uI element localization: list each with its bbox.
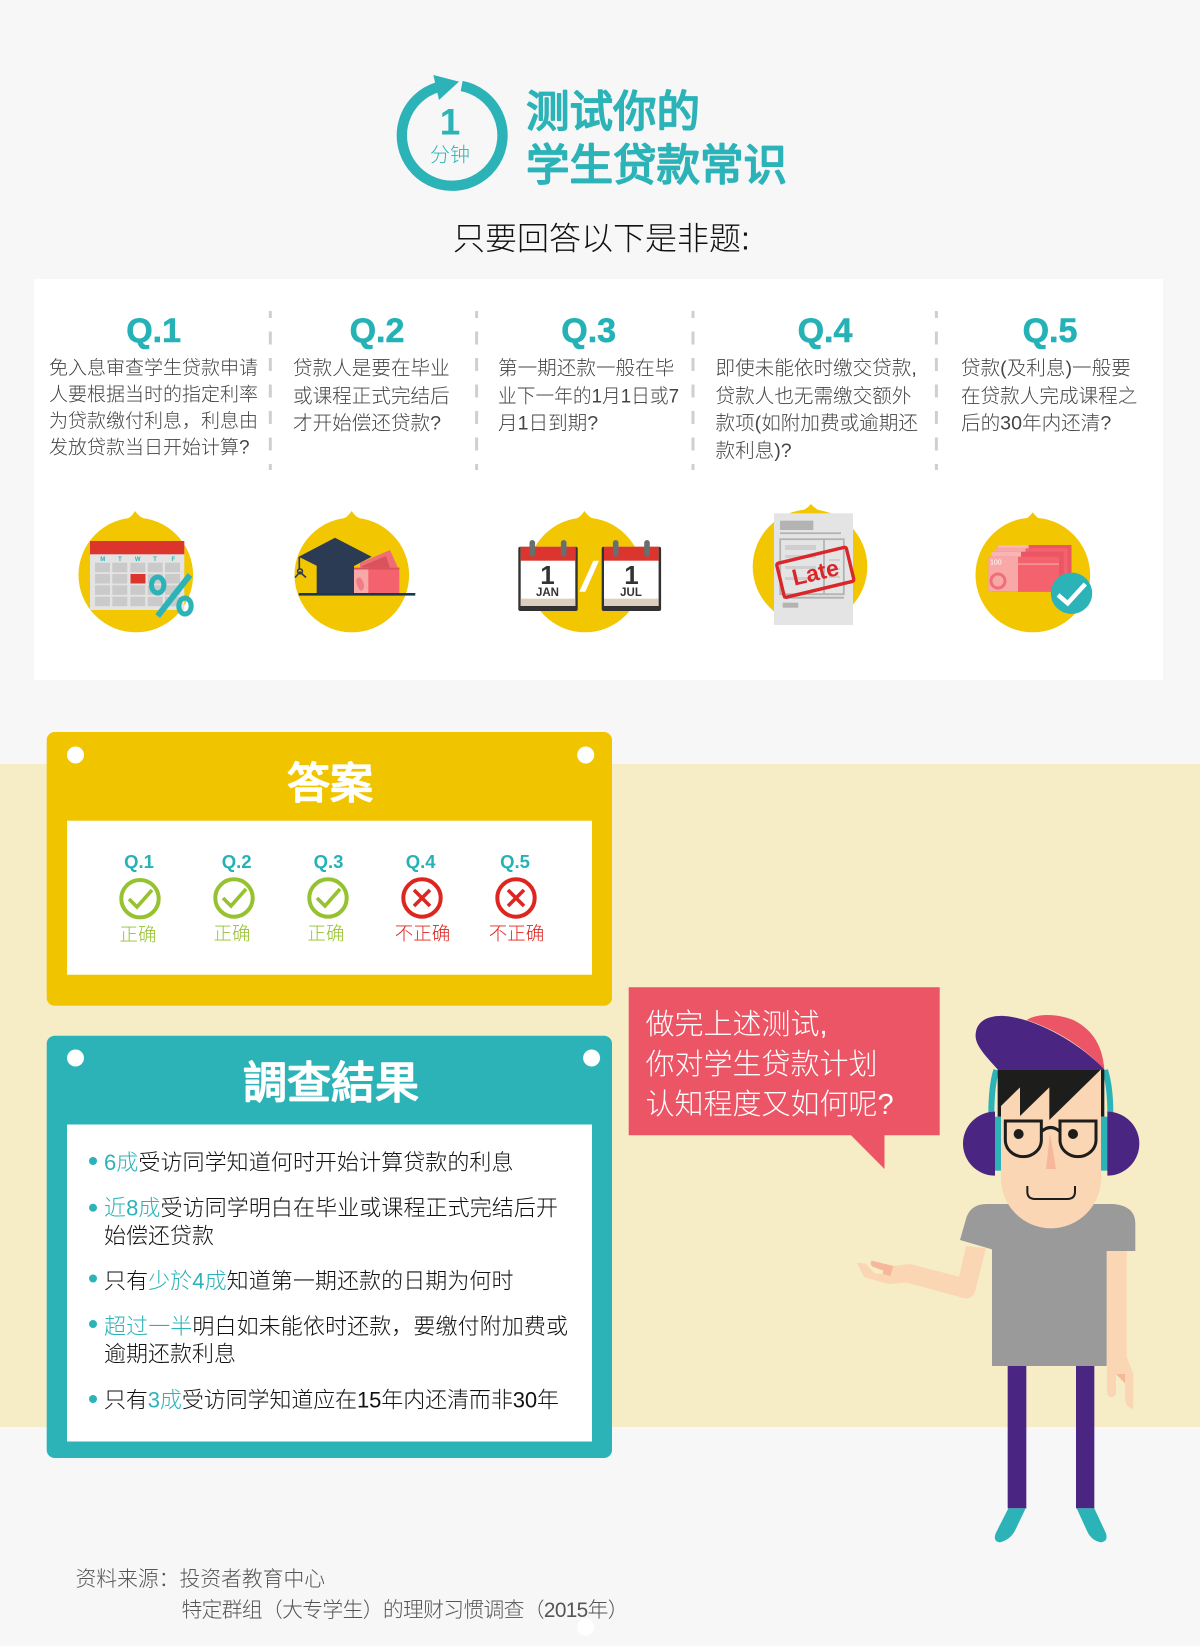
speech bubble: 认知程度又如何呢? [646, 1088, 894, 1121]
answer 4: Q.4 [406, 851, 436, 872]
speech bubble: 你对学生贷款计划 [646, 1048, 878, 1081]
ear cups [963, 1112, 1139, 1176]
icon: calendar with percent [78, 511, 193, 632]
answer 4 [395, 851, 450, 944]
question 5 [961, 312, 1137, 435]
legs [1008, 1366, 1094, 1508]
question 1 [49, 312, 258, 458]
question 3: 月1日到期? [498, 413, 598, 435]
survey bullet list: 超过一半明白如未能依时还款，要缴付附加费或 [104, 1314, 568, 1339]
survey bullet list: 只有少於4成知道第一期还款的日期为何时 [104, 1269, 514, 1294]
header: one minute quiz title [402, 75, 787, 256]
title: 测试你的 [526, 89, 700, 137]
question 4: 款项(如附加费或逾期还 [716, 413, 918, 435]
speech bubble: 做完上述测试, [646, 1008, 828, 1041]
icon: one minute timer ring [402, 75, 503, 186]
eyes [1014, 1129, 1078, 1139]
icon: banknotes with check mark [976, 512, 1092, 632]
headphones band [991, 1070, 1110, 1113]
question 5: Q.5 [1023, 312, 1077, 350]
title: 学生贷款常识 [526, 143, 787, 191]
survey bullet list: 近8成受访同学明白在毕业或课程正式完结后开 [104, 1196, 558, 1221]
face [1001, 1069, 1101, 1228]
panel: answers [47, 732, 612, 1006]
source note [76, 1568, 628, 1636]
title [526, 89, 787, 191]
heading: answers: 答案 [287, 761, 373, 809]
icon: calendar with percent: T [153, 557, 157, 563]
right arm [1107, 1251, 1133, 1409]
question 4: 即使未能依时缴交贷款, [716, 358, 917, 380]
survey bullet list: 6成受访同学知道何时开始计算贷款的利息 [104, 1150, 514, 1175]
question 4 [716, 312, 918, 462]
question 3 [498, 312, 679, 435]
answer 5: 不正确 [489, 923, 544, 944]
icon: graduation cap and banknotes [294, 511, 415, 632]
answer 3: Q.3 [314, 851, 343, 872]
question 4: 贷款人也无需缴交额外 [716, 385, 911, 407]
answer 5 [489, 851, 544, 944]
answer 1 [119, 851, 159, 945]
question 5: 贷款(及利息)一般要 [961, 358, 1131, 380]
heading: survey results: 調查結果 [243, 1059, 419, 1108]
question 1: 为贷款缴付利息，利息由 [49, 410, 258, 432]
question 1: Q.1 [126, 312, 181, 350]
calendar: July: JUL [620, 587, 642, 599]
answer 3: 正确 [307, 923, 345, 944]
question 1: 人要根据当时的指定利率 [49, 384, 258, 406]
question 4: 款利息)? [716, 440, 792, 462]
answer 1: 正确 [119, 924, 157, 945]
illustration: student with headphones [857, 1015, 1139, 1542]
calendar: January: JAN [536, 587, 559, 599]
icon: one minute timer ring: 1 [440, 102, 460, 142]
survey bullet list [89, 1150, 568, 1412]
question 2: 才开始偿还贷款? [293, 413, 441, 435]
icon: January and July calendars [518, 511, 661, 632]
survey bullet list: 始偿还贷款 [104, 1223, 214, 1248]
icon: one minute timer ring: 分钟 [430, 144, 470, 166]
question 5: 在贷款人完成课程之 [961, 385, 1137, 407]
icon: late payment document: Late [789, 554, 841, 591]
panel: five true or false questions [34, 279, 1163, 680]
left arm [857, 1246, 986, 1298]
question 3: 业下一年的1月1日或7 [498, 385, 679, 407]
cap [1027, 1015, 1104, 1069]
question 2: 或课程正式完结后 [293, 385, 450, 407]
icon: calendar with percent: W [135, 557, 141, 563]
answer 4: 不正确 [395, 923, 450, 944]
calendar: July [602, 540, 661, 611]
nose [1046, 1133, 1056, 1169]
speech bubble [629, 987, 940, 1169]
answer 2: Q.2 [222, 851, 252, 872]
answer 2 [213, 851, 253, 944]
t-shirt [960, 1204, 1135, 1366]
subtitle: 只要回答以下是非题: [453, 220, 750, 256]
answer 2: 正确 [213, 923, 251, 944]
answer 1: Q.1 [124, 851, 154, 872]
question 2: 贷款人是要在毕业 [293, 358, 450, 380]
calendar: July: 1 [624, 560, 639, 590]
answer 5: Q.5 [500, 851, 530, 872]
icon: calendar with percent: M [100, 557, 105, 563]
question 1: 免入息审查学生贷款申请 [49, 357, 258, 379]
icon: calendar with percent: F [171, 557, 175, 563]
glasses [1005, 1121, 1096, 1157]
question 2 [293, 312, 450, 435]
calendar: January: 1 [540, 560, 555, 590]
icon: late payment document [753, 504, 867, 625]
source note: 特定群组（大专学生）的理财习惯调查（2015年） [182, 1599, 628, 1622]
question 2: Q.2 [350, 312, 404, 350]
mouth [1027, 1186, 1075, 1199]
icon: banknotes with check mark: 100 [990, 560, 1002, 566]
survey bullet list: 只有3成受访同学知道应在15年内还清而非30年 [104, 1387, 559, 1412]
icon: calendar with percent: T [118, 557, 122, 563]
question 5: 后的30年内还清? [961, 413, 1111, 435]
panel: survey results [47, 1036, 612, 1458]
survey bullet list: 逾期还款利息 [104, 1342, 236, 1367]
hair [998, 1069, 1104, 1120]
source note: 资料来源：投资者教育中心 [76, 1568, 325, 1591]
shoes [995, 1508, 1107, 1542]
question 3: Q.3 [561, 312, 616, 350]
calendar: January [518, 540, 578, 611]
answer 3 [307, 851, 347, 944]
question 3: 第一期还款一般在毕 [498, 358, 674, 380]
question 4: Q.4 [798, 312, 852, 350]
question 1: 发放贷款当日开始计算? [49, 436, 250, 458]
